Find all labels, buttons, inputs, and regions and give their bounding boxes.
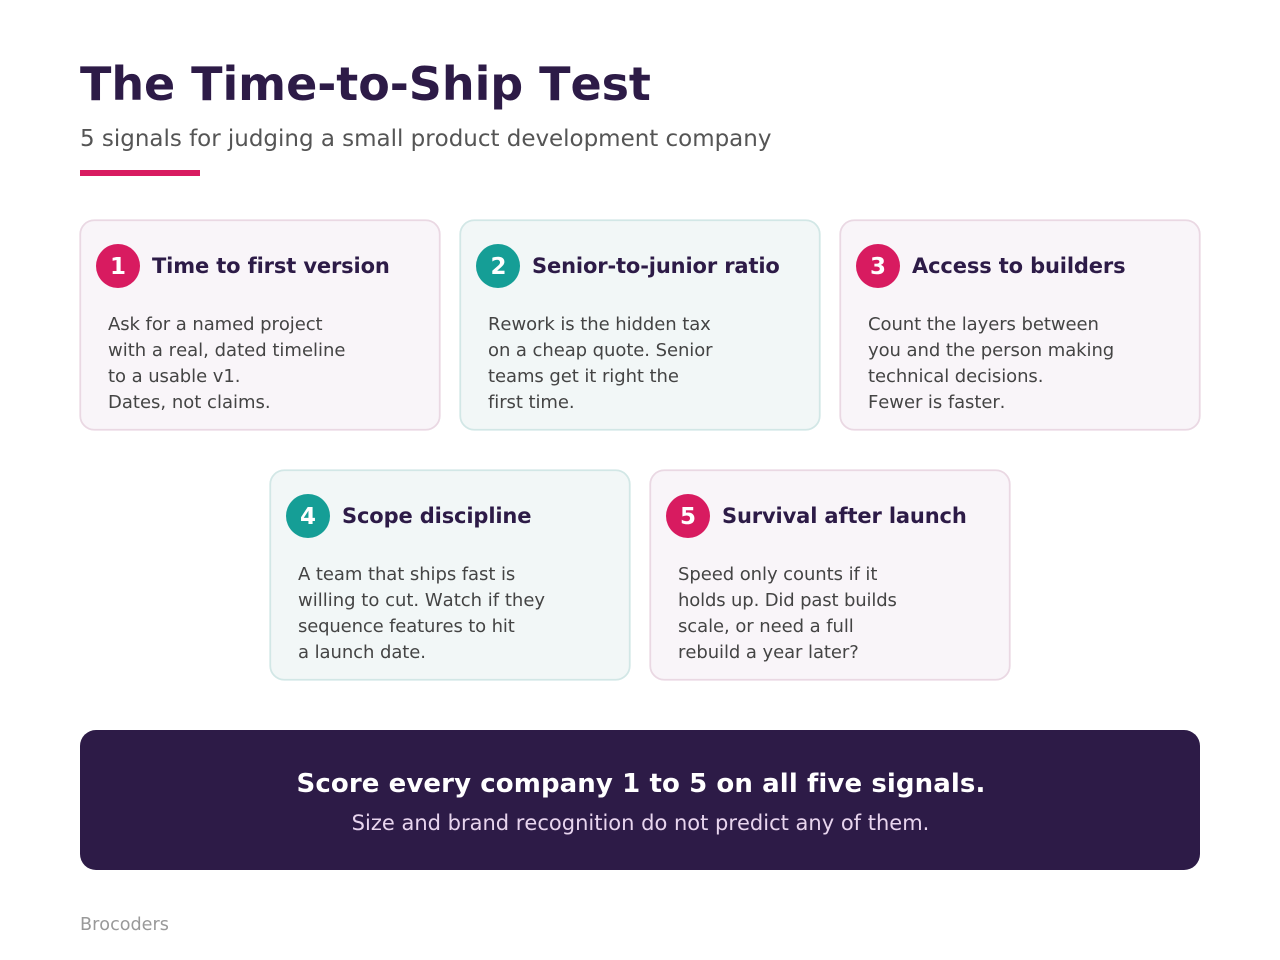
text: signal 5: holds up. Did past builds	[678, 590, 897, 611]
icon: number 5: 5	[680, 504, 696, 530]
text: signal 1: Dates, not claims.	[108, 392, 271, 413]
banner subtext: Size and brand recognition do not predict any of them.	[352, 811, 929, 835]
heading: signal 5: Survival after launch	[722, 504, 967, 528]
panel: summary banner	[80, 730, 1200, 870]
icon: number 3	[856, 244, 900, 288]
panel: signal 3	[840, 220, 1200, 430]
icon: number 1	[96, 244, 140, 288]
icon: number 4: 4	[300, 504, 316, 530]
text: signal 4: a launch date.	[298, 642, 426, 663]
panel: signal 4	[270, 470, 630, 680]
icon: number 3: 3	[870, 254, 886, 280]
panel: signal 2	[460, 220, 820, 430]
text: signal 1	[108, 314, 346, 413]
text: signal 2: on a cheap quote. Senior	[488, 340, 713, 361]
subtitle: 5 signals for judging a small product development company	[80, 126, 771, 152]
icon: number 1: 1	[110, 254, 126, 280]
text: signal 4: A team that ships fast is	[298, 564, 515, 585]
text: signal 2: first time.	[488, 392, 575, 413]
text: signal 3: Count the layers between	[868, 314, 1099, 335]
text: signal 3	[868, 314, 1114, 413]
text: signal 1: with a real, dated timeline	[108, 340, 346, 361]
text: signal 4	[298, 564, 545, 663]
title: The Time-to-Ship Test	[80, 57, 651, 111]
text: signal 3: Fewer is faster.	[868, 392, 1005, 413]
heading: signal 3: Access to builders	[912, 254, 1125, 278]
accent bar	[80, 170, 200, 176]
heading: signal 1: Time to first version	[152, 254, 390, 278]
heading: signal 4: Scope discipline	[342, 504, 531, 528]
banner headline: Score every company 1 to 5 on all five signals.	[297, 769, 985, 799]
text: signal 5: rebuild a year later?	[678, 642, 859, 663]
panel: signal 5	[650, 470, 1010, 680]
text: signal 4: willing to cut. Watch if they	[298, 590, 545, 611]
icon: number 5	[666, 494, 710, 538]
icon: number 2: 2	[490, 254, 507, 280]
panel: signal 1	[80, 220, 440, 430]
text: signal 3: you and the person making	[868, 340, 1114, 361]
text: signal 5: Speed only counts if it	[678, 564, 877, 585]
footer brand: Brocoders	[80, 915, 169, 935]
text: signal 4: sequence features to hit	[298, 616, 515, 637]
text: signal 2: Rework is the hidden tax	[488, 314, 711, 335]
text: signal 1: Ask for a named project	[108, 314, 323, 335]
text: signal 1: to a usable v1.	[108, 366, 240, 387]
text: signal 5	[678, 564, 897, 663]
icon: number 2	[476, 244, 520, 288]
heading: signal 2: Senior-to-junior ratio	[532, 254, 780, 278]
icon: number 4	[286, 494, 330, 538]
text: signal 2: teams get it right the	[488, 366, 679, 387]
text: signal 3: technical decisions.	[868, 366, 1043, 387]
text: signal 2	[488, 314, 713, 413]
text: signal 5: scale, or need a full	[678, 616, 854, 637]
